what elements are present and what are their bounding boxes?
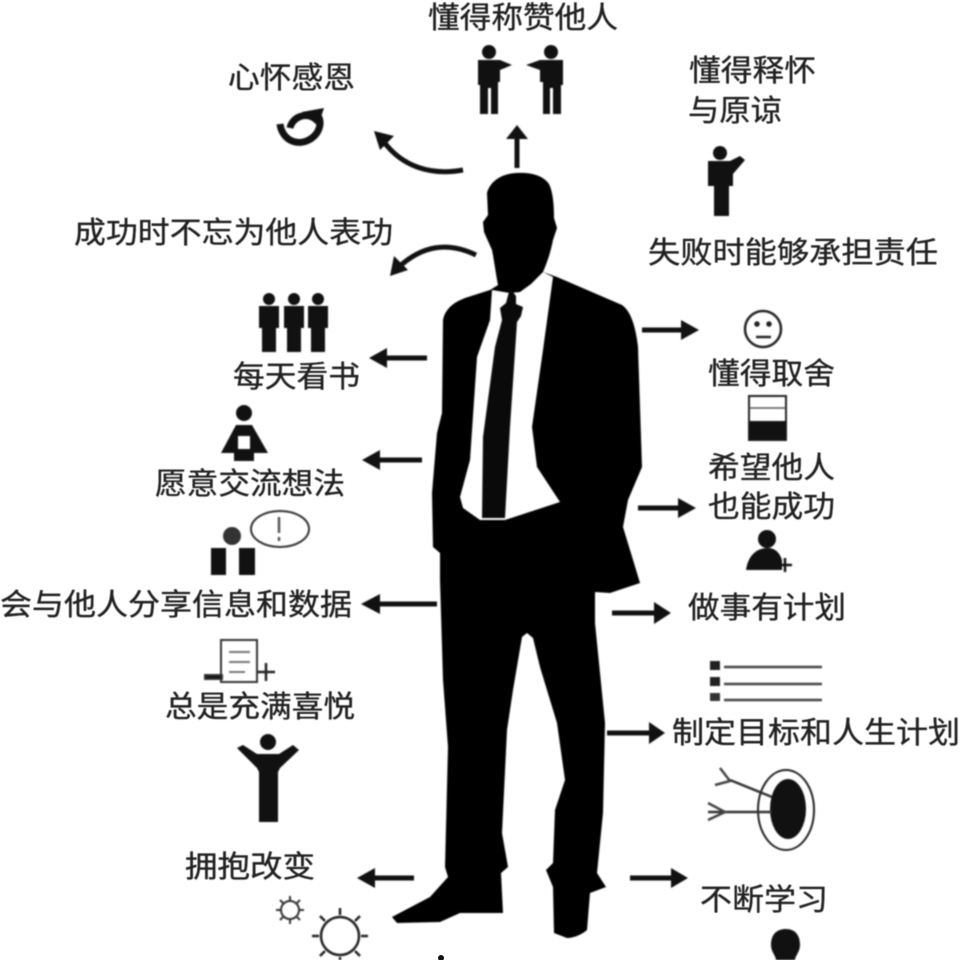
- label: embrace change: 拥抱改变: [185, 851, 315, 884]
- necktie: [482, 288, 523, 518]
- icon: list lines: [710, 661, 822, 701]
- label: know what to give up: 懂得取舍: [708, 358, 835, 391]
- icon: person with speech bubble: [211, 511, 309, 575]
- icon: two people talking: [478, 45, 563, 114]
- label: hope others succeed: [708, 452, 835, 524]
- arrow: to read daily: [369, 348, 427, 368]
- arrow: curved to gratitude: [374, 131, 463, 172]
- icon: large sun: [312, 908, 368, 960]
- arrow: curved to credit others: [390, 247, 476, 276]
- icon: person raising hand: [708, 146, 745, 216]
- label: take responsibility on failure: 失败时能够承担责任: [648, 237, 938, 270]
- icon: person with open book: [221, 405, 268, 461]
- arrow: to plan work: [612, 602, 671, 624]
- small dot: [438, 955, 444, 960]
- icon: light bulb head: [771, 929, 800, 960]
- label: share information and data: 会与他人分享信息和数据: [0, 589, 352, 622]
- label: keep learning: 不断学习: [700, 884, 828, 917]
- arrow: up to praise others: [506, 125, 528, 168]
- icon: small sun: [276, 896, 304, 924]
- central businessman silhouette: [392, 173, 642, 938]
- label: hope others succeed: 也能成功: [708, 491, 835, 524]
- icon: recycle swirl: [280, 108, 324, 142]
- label: set goals and life plan: 制定目标和人生计划: [672, 717, 960, 750]
- arrow: to exchange ideas: [362, 450, 422, 470]
- arrow: to embrace change: [357, 868, 414, 888]
- icon: three people reading: [259, 293, 328, 352]
- white shirt: [460, 272, 560, 520]
- label: hope others succeed: 希望他人: [708, 452, 835, 485]
- icon: person with plus: [746, 530, 792, 572]
- label: release and forgive: 懂得释怀: [689, 55, 816, 88]
- label: gratitude: 心怀感恩: [228, 62, 355, 95]
- arrow: to share information: [361, 594, 437, 614]
- arrow: to know what to give up: [642, 320, 699, 340]
- arrow: to keep learning: [630, 868, 688, 888]
- label: release and forgive: 与原谅: [688, 95, 782, 128]
- icon: half filled box: [749, 396, 786, 440]
- arrow: to hope others succeed: [638, 498, 696, 518]
- label: release and forgive: [688, 55, 816, 128]
- icon: person with arms raised: [237, 734, 299, 822]
- label: always joyful: 总是充满喜悦: [165, 691, 355, 724]
- label: plan work: 做事有计划: [688, 592, 846, 625]
- label: willing to exchange ideas: 愿意交流想法: [155, 468, 345, 501]
- icon: target with arrows: [708, 768, 814, 850]
- icon: smiley face: [745, 311, 781, 347]
- label: read daily: 每天看书: [233, 361, 360, 394]
- icon: document on laptop: [205, 640, 275, 682]
- heading label: praise others: 懂得称赞他人: [428, 2, 618, 35]
- arrow: to set goals: [607, 722, 665, 744]
- label: credit others on success: 成功时不忘为他人表功: [74, 217, 393, 250]
